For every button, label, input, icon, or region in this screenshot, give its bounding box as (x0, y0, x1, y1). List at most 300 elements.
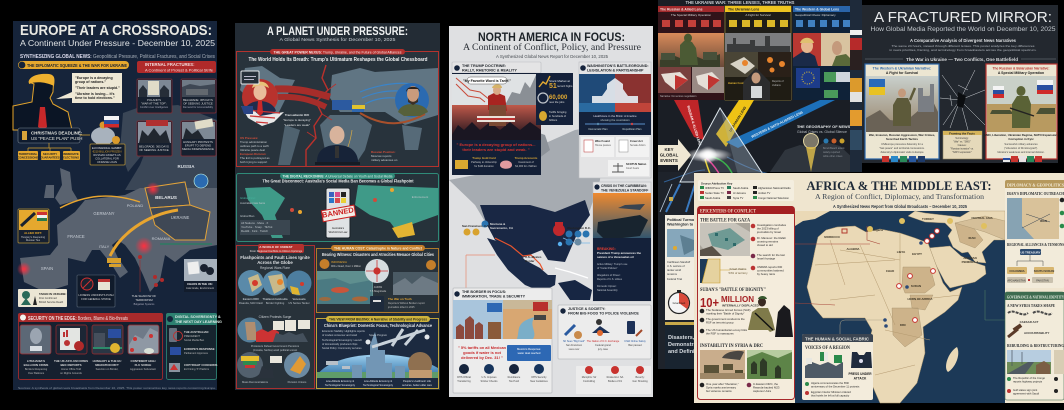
Christmas deadline box: CHRISTMAS DEADLINE: (31, 130, 83, 136)
fracture cards: ERUPT TO DEFEND (185, 144, 211, 148)
police cards: Gun Shooting (632, 380, 648, 383)
section 6: Justice and society: FROM BIG FOOD TO POLICE VIOLENCE (568, 312, 639, 316)
card: Western lens: The Western & Global Lens (795, 8, 839, 12)
fracture cards: BELGRADE: 365 DAYS (139, 144, 169, 148)
diagram: alliances: COLOMBIA (1009, 269, 1025, 273)
world map geography of news: Bondi Beach attack (823, 147, 845, 150)
section C: security: Over Balloons (28, 371, 45, 375)
card: Framing the facts: Terminology: (955, 137, 969, 140)
map: Africa and Middle East: TURKEY (922, 217, 934, 221)
financial gambit box: COLLATERAL FOR (95, 156, 119, 160)
section: human cost: The War on Truth (388, 297, 412, 301)
map: Africa and Middle East: LIBYA (897, 250, 906, 254)
map: Europe: UKRAINE (171, 215, 190, 220)
map: Africa and Middle East: DRC (900, 323, 907, 327)
panel: governance and national (1005, 292, 1064, 400)
narrative notes: outlines path to a swift (240, 144, 269, 148)
section D: digital sovereignty: THE NEXT DAY LEARNING (175, 320, 222, 324)
source key: Syria TV (733, 196, 743, 200)
map: Africa and Middle East: CENTRAL ASIA (971, 216, 994, 220)
section B header (137, 61, 216, 73)
card: Western and Ukrainian narrative: "fast peace" and territorial concessions. (879, 146, 925, 150)
card: Russian lens: The Russian & Allied Lens (660, 8, 703, 12)
fracture cards: BELGRADE: 365 DAYS (183, 98, 213, 102)
callout: Taken card: First Confirmed (39, 296, 57, 300)
map: Africa and Middle East: SUDAN (911, 284, 921, 288)
section 5: Crisis in the Caribbean: seizure of a Venezuelan oil (597, 255, 634, 259)
stats panel: Tariffs bringing (549, 110, 567, 114)
icon: piggy bank and Russian flag (91, 116, 120, 147)
narrative notes: The EU is portrayed as (240, 156, 270, 160)
fracture cards: POLAND'S (147, 98, 161, 102)
card: Western and Ukrainian narrative: War, Invasion, Russian Aggression, War Crimes, (869, 133, 935, 137)
section: view from Beijing: Space Program (369, 333, 387, 337)
stats panel: 60,000 (549, 95, 568, 101)
section pill (270, 49, 405, 54)
section 3: Border in focus: delivered by Dec. 31! " (461, 355, 503, 360)
section 1: Trump doctrine: Investment of (518, 160, 534, 164)
section C: security: SECURITY ON THE EDGE: Borders, Blame & Bio-threats (28, 316, 128, 322)
narrative notes: Moscow reports (371, 154, 392, 158)
section: world of unrest: Mass Demonstrations (242, 380, 269, 384)
section 6: Justice and society (558, 305, 651, 359)
arrow: key global events (658, 139, 691, 171)
world map geography of news: Global Crises vs. Global Silence (797, 130, 847, 134)
section: digital reckoning (236, 173, 438, 242)
stat: 10+ million displaced (700, 295, 760, 310)
section D: digital sovereignty (166, 313, 222, 380)
Gaza bullet list: by heavy rains (757, 272, 776, 276)
section: view from Beijing: Economic Stability: Highlights reports (322, 329, 366, 333)
financial gambit box: UKRAINE LOAN (97, 160, 117, 164)
section: world of unrest: Regional Wars Flare (260, 266, 290, 270)
section 4: Washington's battleground: Wire Found (595, 139, 610, 143)
card: Russian and Belarusian narrative: SMO, Liberation, Ukrainian Regime, NATO Expansion, (984, 133, 1058, 137)
map: Africa and Middle East: ALGERIA (846, 247, 860, 251)
section: view from Beijing (316, 316, 438, 388)
section 5: Crisis in the Caribbean: National Assembly (597, 289, 618, 292)
section C: security: Home Office Told (61, 367, 81, 371)
Sudan bullets: RSF as terrorist group (706, 320, 734, 324)
card: Western lens: Geopolitical Chess: Diplomacy (795, 13, 836, 17)
section 4: Washington's battleground: Democratic Plan (588, 127, 608, 131)
section 4: Washington's battleground: Healthcare in the Brink: A timeline (593, 114, 637, 118)
diagram: alliances: AFGHANISTAN (1007, 278, 1026, 282)
Syria and DRC bullets: Syria marks anniversary (706, 386, 737, 390)
arrow: key global events: GLOBAL (660, 152, 679, 158)
stat: 10+ million displaced: MILLION (721, 295, 754, 304)
section 4: Washington's battleground: Senate Action (630, 144, 646, 147)
section 3: Border in focus: Stricter Checks (481, 380, 498, 383)
Hungary card (18, 209, 49, 243)
section 3: Border in focus: " 5% tariffs on all Mexican (458, 345, 507, 350)
card: Western and Ukrainian narrative: The Western & Ukrainian Narrative: (873, 66, 931, 70)
image: Gaza strip map: Israel claims (730, 267, 747, 271)
voices bullets: anniversary of the December 11 protests (811, 384, 860, 388)
rebuilding bullets: Gulf states sign joint (1013, 388, 1037, 392)
section 1: Trump doctrine: " Europe is a decaying group of nations... (456, 142, 536, 147)
section 4: Washington's battleground: showing the countdown (600, 118, 630, 122)
section 4: Washington's battleground: House passes (595, 144, 612, 147)
Syria and DRC bullets: Rwanda-backed M23 (753, 386, 780, 390)
fracture cards: HUNGARY PROTESTS (183, 140, 213, 144)
rebuilding bullets (1007, 376, 1058, 396)
section: human cost: 900+ Dead, Over 1 Million (331, 264, 362, 268)
stats panel: record highs (557, 84, 573, 88)
world map geography of news: THE GEOGRAPHY OF NEWS: (797, 124, 852, 129)
section 6: Justice and society: The Nation of D.C. Exchange (587, 340, 620, 343)
section 4: Washington's battleground: SCOTUS Nation (626, 162, 647, 166)
world map geography of news: while other crises (823, 155, 843, 158)
section 6: Justice and society: San Francisco (566, 344, 583, 347)
Syria and DRC bullets: One year after "liberation," (706, 382, 739, 386)
Hungary card: Russian Ties (26, 239, 41, 242)
section 5: Crisis in the Caribbean: THE VENEZUELA STANDOFF (601, 188, 648, 192)
section: view from Beijing: Technological Sovereignty: Launch (322, 338, 363, 342)
source key (698, 180, 794, 201)
section: human cost: THE HUMAN COST: Catastrophe in Nature and Conflict (334, 246, 423, 250)
section: view from Beijing: Social Policy: Community services (322, 346, 362, 350)
section 3: Border in focus: THE BORDER IN FOCUS: (462, 290, 506, 294)
icon: press vest: ATTACK (854, 376, 867, 380)
section 3: Border in focus (453, 288, 552, 393)
section: disasters card: Demonstrations, (668, 342, 712, 348)
stats panel: Stock Market at (549, 79, 570, 83)
source key: Afghanistan National Radio (758, 186, 791, 190)
map: Africa and Middle East: EGYPT (912, 252, 922, 256)
panel: Epicenters of conflict: EPICENTERS OF CONFLICT (700, 210, 757, 214)
stats panel: billions (549, 118, 558, 122)
analysis intro: The same 24 hours, viewed through different lenses. This poster analyzes the key differences (892, 44, 1035, 48)
Syria and DRC bullets: In Eastern DRC, the (753, 382, 778, 386)
card: Russian and Belarusian narrative: Successful military advances (1004, 142, 1038, 146)
fracture cards: MEDIA INDEPENDENCE (182, 147, 214, 151)
title: AFRICA & THE MIDDLE EAST: (806, 178, 992, 193)
section: world of unrest: Thailand-Cambodia (263, 297, 288, 301)
callout: Taken card (18, 289, 67, 307)
icon: cracked mirror (940, 70, 985, 130)
image: Gaza ruin (700, 223, 750, 256)
narrative notes: US Pressure: (240, 136, 258, 140)
card: Russian and Belarusian narrative: Corruption in Kyiv (1008, 137, 1034, 141)
icon: Zelensky portrait (395, 83, 429, 117)
icon: press vest (848, 352, 872, 380)
section: digital reckoning: The Great Disconnect: Australia's Social Media Ban Becomes a Global Flashpoint (262, 178, 414, 184)
section 3: Border in focus: DHS Security (531, 376, 547, 379)
panel: A Fractured Mirror (862, 5, 1058, 163)
section 5: Crisis in the Caribbean: President Trump announces the (597, 251, 641, 255)
overlapped card: political turmoil: Government (673, 302, 686, 305)
beam labels: RUSSIAN & ALLIED LENS (686, 105, 702, 147)
icon: American flag USA (241, 106, 284, 126)
section 3: Border in focus: water deal reached (518, 351, 541, 355)
stats panel: in hundreds of (549, 114, 566, 118)
Gaza bullet list: Investigation concludes (757, 223, 787, 227)
section: view from Beijing: China's Blueprint: Domestic Focus, Technological Advance (324, 323, 433, 328)
section: world of unrest: (Croatia, Serbia) amid political unrest (253, 348, 297, 352)
section 5: Crisis in the Caribbean: Active Military: Trump's use (597, 263, 628, 266)
section A header (18, 61, 129, 69)
image: DRC fighters (747, 350, 792, 379)
overlapped card: political turmoil: U.S. seizure of (667, 264, 685, 268)
section: human cost: JAPAN (374, 285, 382, 289)
stat: 10+ million displaced: INTERNALLY DISPLACED (722, 304, 760, 308)
card: Western and Ukrainian narrative: Scorched Earth Tactics (886, 137, 918, 141)
icon: phone with ban stamp: BANNED (321, 205, 355, 220)
section: digital reckoning: THE DIGITAL RECKONING: A Universal Debate on Youth and Social Media (282, 174, 393, 178)
icon: broken chain: CAESAR ACT (1020, 320, 1039, 324)
source key: Saudi Arabia (705, 196, 721, 200)
beam labels: UKRAINIAN LENS (728, 105, 748, 133)
section C: security: MIGRATION RIFT (95, 363, 119, 367)
section 1: Trump doctrine: RALLY, RHETORIC & REALITY (462, 68, 517, 72)
section headline: The World Holds Its Breath: Trump's Ultimatum Reshapes the Global Chessboard (248, 57, 428, 63)
three demand boxes (18, 151, 80, 160)
rebuilding bullets: The Republic of the Congo (1013, 376, 1045, 380)
map: Africa and Middle East: Algeria (873, 228, 883, 232)
icon: Trump silhouette (13, 74, 72, 130)
narrative notes: Russian Position: (371, 150, 395, 154)
source key: IRINN/Press TV (705, 186, 724, 190)
section 3: Border in focus: Tax Push (509, 380, 520, 383)
callout: Taken card: TAKEN IN UKRAINE: (39, 292, 67, 296)
section D: digital sovereignty: DIGITAL SOVEREIGNTY & (175, 315, 221, 319)
fracture cards (137, 79, 216, 156)
speech bubble quotes: "Europe is a decaying (75, 76, 113, 80)
broadcaster icons left (882, 156, 925, 162)
map: North America: Washington D.C. (567, 226, 591, 230)
card: Framing the facts: Framing the Facts (949, 131, 975, 135)
shadow label: THE SHADOW OF (132, 294, 156, 298)
section: view from Beijing: Low-Altitude Economy & (364, 379, 392, 383)
section: world of unrest: Citizen Protests Surge (259, 315, 292, 319)
image: flag demonstration (805, 352, 843, 378)
section: world of unrest: Flashpoints and Fault Lines Ignite (240, 255, 310, 260)
section: human cost: Reporters Without Borders report (388, 302, 425, 305)
card: Western and Ukrainian narrative (865, 64, 939, 159)
stats panel: new tile jobs (549, 100, 565, 104)
callout: Taken card: British Service Death (39, 300, 64, 304)
section D: digital sovereignty: EUROPE'S RESPONSE (184, 347, 215, 351)
image: Syria convoy (700, 350, 745, 379)
section 6: Justice and society: sues over (569, 348, 580, 351)
section 3: Border in focus: U.S. Imposes (481, 376, 497, 379)
card: Russian and Belarusian narrative: The Russian & Belarusian Narrative: (993, 66, 1049, 70)
shadow label (132, 255, 164, 306)
section 5: Crisis in the Caribbean: of "Cartel Policies" (597, 267, 618, 270)
Gaza bullet list: crossing remains (757, 240, 779, 244)
map: Europe: BELARUS (155, 195, 177, 200)
financial gambit box: €210 BILLION FROZEN (93, 150, 121, 154)
section: disasters card (665, 322, 712, 369)
Chaos in UK card: Asia Grade, Environment (186, 287, 214, 290)
stat: 10+ million displaced: 10+ (700, 295, 719, 310)
section: view from Beijing: of domestically produced chips (322, 342, 358, 346)
section: great power nexus (236, 52, 438, 166)
panel: Africa and the Middle East (694, 173, 1064, 403)
source key: Sudan State TV (705, 191, 724, 195)
analysis intro (890, 38, 1037, 52)
card: Russian lens: The Special Military Operation (671, 13, 711, 17)
section 6: Justice and society: Child Online Safety (624, 340, 646, 343)
section: world of unrest: Venezuela (292, 297, 306, 301)
Syria and DRC bullets: captures Uvira (753, 389, 771, 393)
note lists: All Nations · Meta · X (241, 221, 268, 225)
map: North America (449, 125, 605, 300)
speech bubble quotes: "Their leaders are stupid." (75, 86, 120, 90)
three demand boxes: IMMEDIATE (63, 152, 79, 156)
section C: security: THE UK ASYLUM CRISIS (54, 359, 88, 363)
section: world of unrest: Border Fighting (266, 301, 285, 305)
section 3: Border in focus: IMMIGRATION, TRADE & SECURITY (462, 294, 526, 298)
Hungary card: Hungary's Deepening (21, 236, 46, 239)
transatlantic rift note: Transatlantic Rift (285, 113, 309, 117)
title: NORTH AMERICA IN FOCUS: (478, 32, 625, 44)
shadow label: TERRORISM (135, 298, 153, 302)
image: Sudanese soldiers (748, 296, 793, 337)
section: disasters card: Disasters, (668, 335, 695, 341)
card: Russian and Belarusian narrative: Ukraine's weakness and internal division. (997, 150, 1045, 154)
police cards: Controlling (583, 380, 596, 383)
Sudan bullets: The Sudanese Armed Forces (SAF) (706, 308, 751, 312)
Chaos in UK card: CHAOS IN THE UK: (187, 282, 213, 286)
section A header: THE DIPLOMATIC SQUEEZE & THE WAR FOR UKRAINE (27, 63, 127, 68)
section: world of unrest: Pension Unions (288, 380, 307, 384)
section: world of unrest: Protesters Defeat Government Pensions (251, 344, 300, 348)
card: Western and Ukrainian narrative: A Fight for Survival (886, 71, 918, 75)
map: North America: U.S.-Mexico (525, 255, 542, 259)
map: Europe: FRANCE (67, 234, 85, 239)
subtitle: A Continent Under Pressure - December 10, 2025 (20, 38, 215, 48)
section: human cost (316, 245, 438, 312)
section 1: Trump doctrine: Pathway to citizenship (471, 160, 497, 164)
Sudan bullets (700, 308, 751, 336)
section 6: Justice and society: JUSTICE & SOCIETY: (568, 307, 605, 311)
map: Europe: ITALY (99, 244, 110, 249)
arrow: key global events: EVENTS (660, 158, 678, 163)
kicker: A Synthesized Global News Report for December 10, 2025 (496, 54, 609, 59)
section D: digital sovereignty: COPYRIGHT CONCERNS (184, 363, 218, 367)
overlapped card: political turmoil: tanker amid (667, 268, 682, 272)
icon: phone with ban stamp (321, 188, 356, 238)
note lists: YouTube · Snap · TikTok (241, 225, 273, 229)
card: Framing the facts: Causes: (958, 144, 967, 147)
overlapped card: political turmoil: tensions (667, 272, 678, 276)
title: EUROPE AT A CROSSROADS: (20, 22, 212, 39)
narrative notes: Trump administration (240, 140, 267, 144)
panel: Europe at a Crossroads (13, 21, 222, 390)
transatlantic rift note: "Leaders are weak" (284, 123, 310, 127)
subtitle: A Global News Synthesis for December 10, 2025 (280, 37, 396, 42)
section: world of unrest (236, 244, 314, 388)
note lists: Reddit · Kick · Twitch (241, 229, 268, 233)
card: Russian and Belarusian narrative: A Special Military Operation (998, 71, 1044, 75)
Sudan bullets: marking their "Battle of Dignity" (706, 312, 745, 316)
card: Ukrainian lens: civilians (772, 84, 782, 87)
police cards: Bodies of 19 (608, 380, 623, 383)
section 3: Border in focus: Mexico's Response: (517, 347, 541, 351)
section 5: Crisis in the Caribbean: Allegations of Power: (597, 274, 621, 277)
rebuilding bullets: agreement with Saudi (1013, 392, 1039, 396)
panel: prism of global events (658, 0, 862, 369)
narrative notes: both trying to support (240, 160, 267, 164)
section C: security: BBC REPORTS (60, 363, 82, 367)
fracture cards: OF SEEKING JUSTICE (183, 102, 213, 106)
section 6: Justice and society: jury case (597, 348, 609, 351)
shadow of terrorism card: FOR GENERAL STRIKE (81, 297, 111, 301)
section 5: Crisis in the Caribbean: CRISIS IN THE CARIBBEAN: (601, 184, 647, 188)
heading strip: THE UKRAINE WAR: THREE LENSES, THREE TRUTHS (686, 0, 795, 5)
panel: human and social fabric: THE HUMAN & SOCIAL FABRIC (805, 336, 870, 342)
section 4: Washington's battleground: Republican Plan (623, 127, 642, 131)
financial gambit box (90, 144, 125, 165)
diagram: alliances: PAKISTAN (1036, 278, 1049, 282)
narrative notes: Ukraine peace deal (240, 148, 265, 152)
map: Africa and Middle East: PENINSULA (962, 260, 979, 264)
section 1: Trump doctrine: for $1M donation (474, 164, 494, 168)
card: Ukrainian lens (725, 6, 791, 100)
note lists (240, 195, 428, 235)
overlapped card: political turmoil (665, 215, 698, 320)
card: Ukrainian lens: Human Cost: (728, 81, 744, 85)
section: human cost: INDONESIA (331, 260, 347, 264)
analysis intro: A Comparative Analysis of Divergent News Narratives (910, 38, 1016, 43)
beams from prism (664, 100, 862, 182)
three demand boxes: ELECTIONS (63, 156, 79, 160)
three demand boxes: TERRITORIAL (19, 152, 38, 156)
police cards: Rookerizet: SA (607, 376, 624, 379)
section: human cost: journalists killed in 2025 (387, 306, 415, 309)
fracture cards: OF SEEKING JUSTICE (139, 148, 169, 152)
section 6: Justice and society: Ban passed (628, 344, 642, 347)
fracture cards: "WAR AT THE TOP": (141, 102, 167, 106)
section: view from Beijing: Technological Sovereignty (363, 383, 394, 387)
section 3: Border in focus: Transferring (457, 380, 471, 383)
financial gambit box: EU FINANCIAL GAMBIT: (92, 146, 122, 150)
three demand boxes: CONCESSIONS (18, 156, 38, 160)
icon: phone with ban stamp: World-First Law (329, 230, 347, 234)
source key: Congo National Television (758, 196, 790, 200)
Gaza bullet list: closed to aid (757, 243, 773, 247)
Hungary card: ALLIED RIFT: (24, 231, 42, 235)
financial gambit box: RUSSIAN ASSETS AS (93, 153, 121, 157)
section 4: Washington's battleground: Court hears (626, 167, 640, 170)
map: Europe: GERMANY (93, 211, 115, 216)
section: view from Beijing: services, better elder care (402, 383, 432, 387)
map: Africa and Middle East (795, 211, 1005, 403)
section 1: Trump doctrine (452, 62, 541, 175)
note lists: Enforcement (412, 195, 428, 199)
section 1: Trump doctrine: their leaders are stupid and weak. " (462, 147, 530, 152)
panel: North America in Focus (449, 26, 653, 397)
panel: diplomacy and geopolitics (1005, 180, 1064, 288)
map: Africa and Middle East: HORN OF AFRICA (908, 297, 933, 301)
card: Ukrainian lens: The Ukrainian Lens (728, 8, 759, 12)
overlapped card: political turmoil: Washington to (667, 222, 694, 226)
section 5: Crisis in the Caribbean: Domestic Uproar: (597, 285, 617, 288)
section 5: Crisis in the Caribbean: Reports of U.S. strikes (597, 278, 623, 281)
section: world of unrest: Across the Globe (257, 260, 293, 265)
panel: human and social fabric: VOICES OF A REGION (805, 346, 850, 351)
diagram: alliances: SOUTH SUDAN (1034, 269, 1054, 273)
overlapped card: political turmoil: Federal Trial (667, 277, 682, 281)
Gaza bullet list (751, 223, 787, 276)
police cards: Memphis: Sir (582, 376, 596, 379)
title: A FRACTURED MIRROR: (874, 9, 1052, 26)
section C: security: FLU SURGE (135, 363, 151, 367)
section D: digital sovereignty: EU Fining 'X' Platform (184, 367, 209, 371)
section 5: Crisis in the Caribbean: BREAKING: (597, 247, 616, 251)
